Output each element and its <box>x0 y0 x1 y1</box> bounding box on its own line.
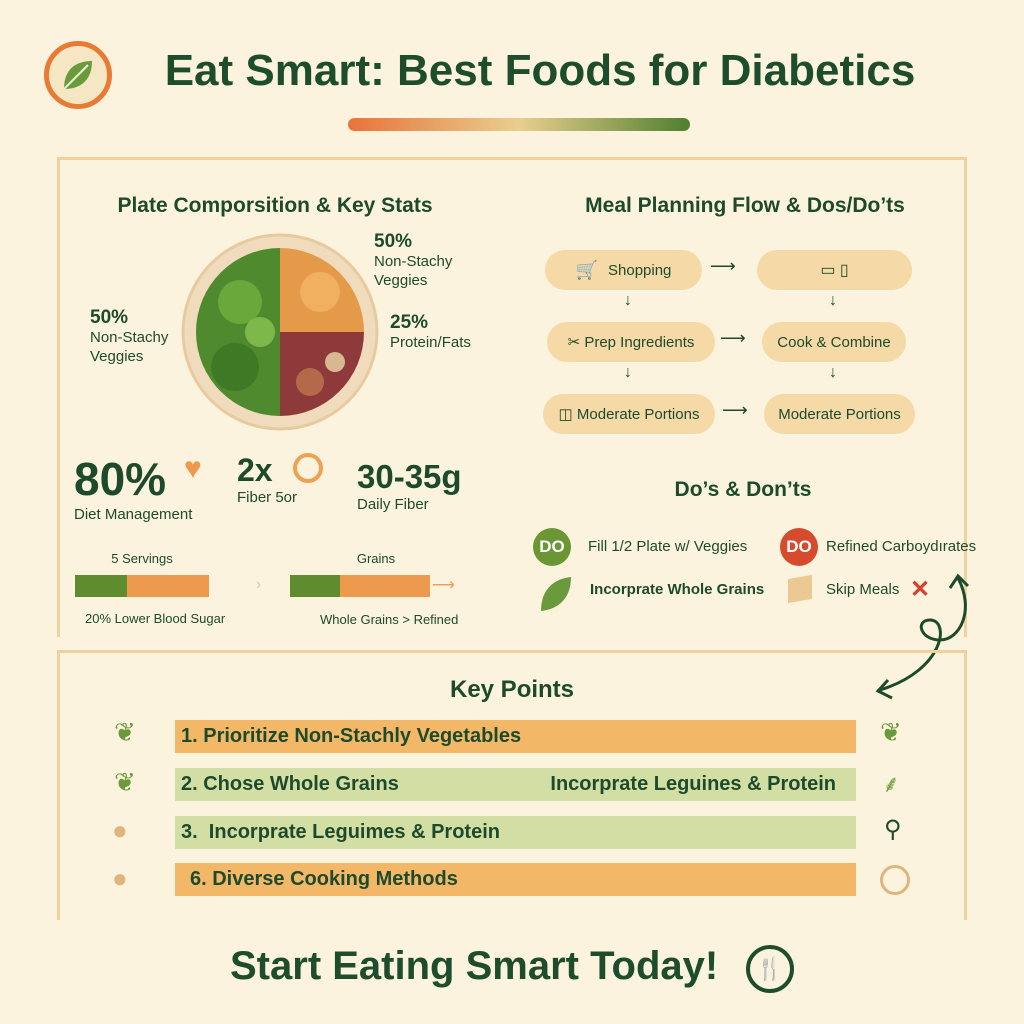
text: › <box>256 576 261 593</box>
text: 50% <box>90 307 128 328</box>
flow chart: ✂ Prep Ingredients <box>568 334 694 351</box>
arrow: curly <box>876 574 969 700</box>
heading: dos and donts: Do’s & Don’ts <box>675 478 811 501</box>
stat: 2x: 2x <box>237 452 273 488</box>
icon: fork and knife: 🍴 <box>756 956 784 981</box>
dos list: DO <box>786 537 812 556</box>
icon: fork and knife <box>746 945 794 993</box>
flow chart: ◫ Moderate Portions <box>559 406 699 423</box>
heading: meal planning: Meal Planning Flow & Dos/Do’ts <box>585 194 905 217</box>
flow chart: ⟶ <box>720 328 746 348</box>
plate labels: Non-Stachy <box>374 253 452 270</box>
key point bars: Incorprate Leguines & Protein <box>550 773 836 795</box>
flow chart: ▭ ▯ <box>820 262 849 279</box>
key point bars: ❦ <box>114 767 136 797</box>
panel: top <box>57 157 967 637</box>
bar: servings: 20% Lower Blood Sugar <box>85 611 225 626</box>
icon: heart: ♥ <box>184 452 202 485</box>
stat: 30-35g: Daily Fiber <box>357 496 429 513</box>
flow chart: ⟶ <box>710 256 736 276</box>
flow chart: ↓ <box>829 364 837 381</box>
heading: plate: Plate Comporsition & Key Stats <box>117 194 433 217</box>
key point bars <box>112 717 910 896</box>
plate chart <box>182 234 378 430</box>
text: Non-Stachy <box>90 329 168 346</box>
key point bars: ⸙ <box>882 771 900 798</box>
flow chart: 🛒 <box>576 260 598 280</box>
bar: servings: 5 Servings <box>111 551 173 566</box>
dos list: Fill 1/2 Plate w/ Veggies <box>588 538 747 555</box>
stat: 80%: 80% <box>74 453 166 505</box>
stat: 80% <box>74 453 192 523</box>
stat: 30-35g <box>357 458 462 513</box>
key point bars: 3. Incorprate Leguimes & Protein <box>181 821 500 843</box>
flow chart: Shopping <box>608 262 671 278</box>
footer: Start Eating Smart Today! <box>230 944 718 988</box>
flow chart: ⟶ <box>722 400 748 420</box>
stat: 30-35g: 30-35g <box>357 458 462 495</box>
stat: 80%: Diet Management <box>74 506 192 523</box>
flow chart: ↓ <box>624 364 632 381</box>
bar: grains <box>290 551 458 627</box>
key point bars: ⚲ <box>884 816 902 843</box>
plate labels <box>374 231 452 289</box>
dos list: Refined Carboydırates <box>826 538 976 555</box>
logo icon <box>44 41 112 109</box>
key point bars: ❦ <box>880 717 902 747</box>
stat: 2x: Fiber 5or <box>237 489 297 506</box>
icon: swirl <box>293 453 323 483</box>
dos list: Incorprate Whole Grains <box>590 581 764 598</box>
flow chart <box>543 250 915 434</box>
key point bars: 2. Chose Whole Grains <box>181 773 399 795</box>
key point bars: ❦ <box>114 717 136 747</box>
dos list: Skip Meals <box>826 581 899 598</box>
panel: key points <box>57 650 967 920</box>
dos list <box>533 528 976 611</box>
bar: grains: Grains <box>357 551 395 566</box>
title: Eat Smart: Best Foods for Diabetics <box>165 46 915 95</box>
plate labels: 50% <box>374 231 412 252</box>
heading: key points: Key Points <box>450 676 574 703</box>
flow chart: Cook & Combine <box>777 334 891 350</box>
bar: grains: Whole Grains > Refined <box>320 612 458 627</box>
text: Protein/Fats <box>390 334 471 351</box>
flow chart: Moderate Portions <box>778 406 901 422</box>
dos list: ✕ <box>910 576 930 603</box>
flow chart: ↓ <box>624 292 632 309</box>
text: 25% <box>390 312 428 333</box>
key point bars: 1. Prioritize Non-Stachly Vegetables <box>181 725 521 747</box>
key point bars: ● <box>112 863 128 893</box>
plate labels: Veggies <box>374 272 427 289</box>
key point bars: ● <box>112 815 128 845</box>
dos list: DO <box>539 537 565 556</box>
key point bars: 6. Diverse Cooking Methods <box>190 868 458 890</box>
bar: servings <box>75 551 225 626</box>
stat: 2x <box>237 452 297 506</box>
bar: grains: ⟶ <box>432 577 455 594</box>
flow chart: ↓ <box>829 292 837 309</box>
gradient bar <box>348 118 690 131</box>
text: Veggies <box>90 348 143 365</box>
